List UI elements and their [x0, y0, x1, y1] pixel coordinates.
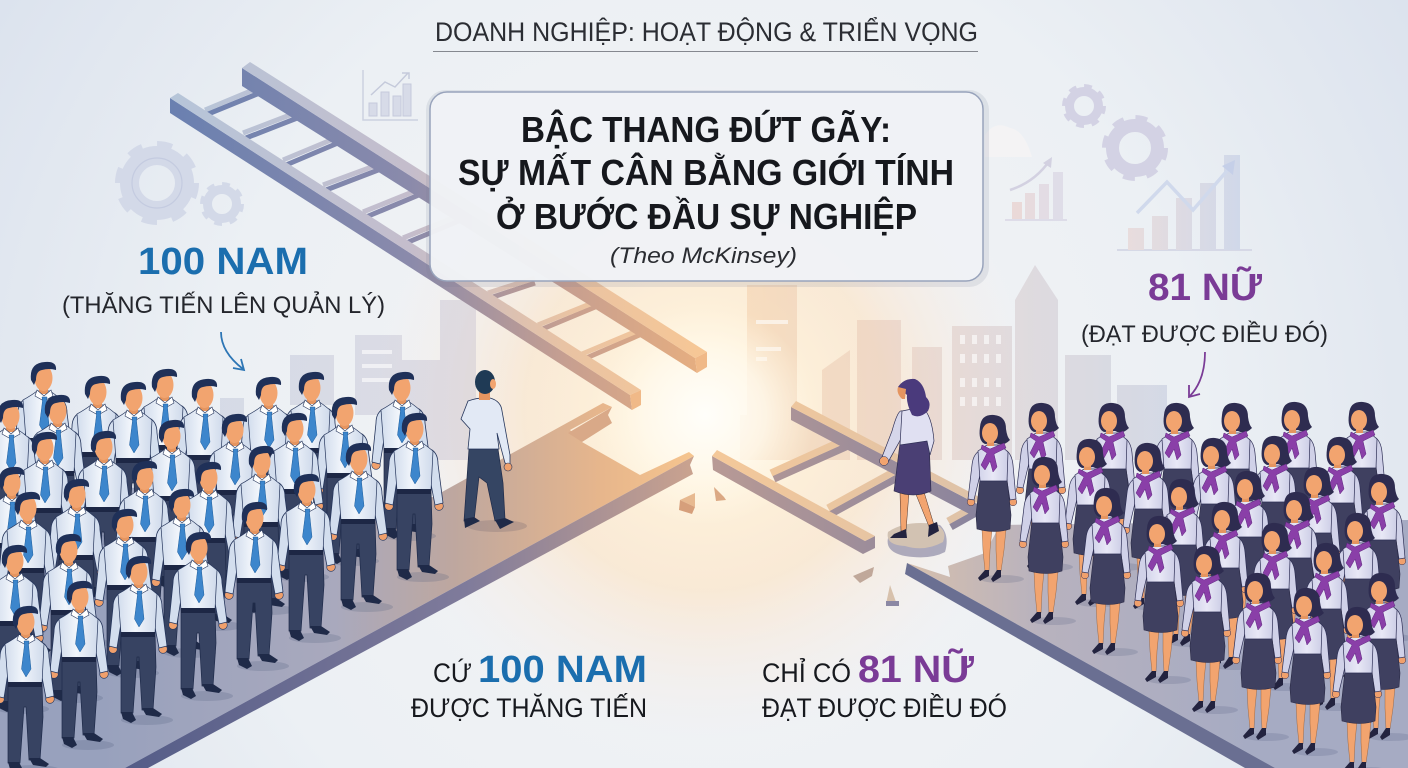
- left floor platform: [0, 403, 694, 768]
- ladder rungs: [208, 90, 644, 359]
- arrow: to women: [1189, 352, 1205, 397]
- label: 100 men: (THĂNG TIẾN LÊN QUẢN LÝ): [62, 290, 385, 319]
- title card: [426, 90, 989, 287]
- bottom stat: women: 81 NỮ: [858, 647, 974, 691]
- label: 81 women: (ĐẠT ĐƯỢC ĐIỀU ĐÓ): [1081, 320, 1328, 348]
- title text: [458, 108, 954, 237]
- ladder: upper broken left section: [170, 62, 707, 410]
- ladder rail front: [170, 93, 641, 410]
- stone patch and rubble right: [853, 523, 947, 606]
- label: 100 men: 100 NAM: [138, 241, 308, 283]
- walking woman: [880, 379, 939, 538]
- section heading: DOANH NGHIỆP: HOẠT ĐỘNG & TRIỂN VỌNG: [435, 16, 978, 47]
- crowd: 81 women: [967, 402, 1408, 768]
- label: 81 women: 81 NỮ: [1148, 265, 1262, 309]
- title text: Ở BƯỚC ĐẦU SỰ NGHIỆP: [496, 195, 917, 237]
- right ladder section: [712, 401, 985, 554]
- bottom stat: men: CỨ: [433, 657, 472, 688]
- label: 100 men: [62, 241, 385, 319]
- right floor platform: [905, 520, 1408, 768]
- icon: large chart right: [1117, 155, 1252, 250]
- bottom stat: women: ĐẠT ĐƯỢC ĐIỀU ĐÓ: [762, 692, 1007, 723]
- icon: small chart right: [1005, 157, 1067, 220]
- source note: (Theo McKinsey): [610, 243, 797, 268]
- ladder rail back: [242, 62, 707, 373]
- bottom stat: men: [411, 649, 647, 723]
- bottom stat: men: 100 NAM: [478, 649, 647, 691]
- building windows: [362, 320, 1001, 406]
- crowd: 100 men: [0, 362, 449, 768]
- label: 81 women: [1081, 265, 1328, 348]
- right rail far: [791, 401, 985, 518]
- rung pieces: [771, 439, 976, 527]
- bottom stat: women: CHỈ CÓ: [762, 656, 851, 688]
- glow core: [560, 280, 860, 550]
- title text: BẬC THANG ĐỨT GÃY:: [521, 108, 891, 150]
- title text: SỰ MẤT CÂN BẰNG GIỚI TÍNH: [458, 151, 954, 193]
- right rail near: [712, 450, 875, 554]
- rubble left: [679, 487, 726, 514]
- bottom stat: men: ĐƯỢC THĂNG TIẾN: [411, 692, 647, 723]
- icon: cloud: [985, 125, 1032, 157]
- walking man: [461, 370, 527, 532]
- city skyline: [220, 265, 1167, 460]
- icon: small chart top left: [363, 70, 418, 120]
- arrow: to men: [221, 332, 244, 370]
- icon: gears left: [118, 144, 242, 224]
- bottom stat: women: [762, 647, 1007, 723]
- icon: gears right: [1064, 86, 1165, 178]
